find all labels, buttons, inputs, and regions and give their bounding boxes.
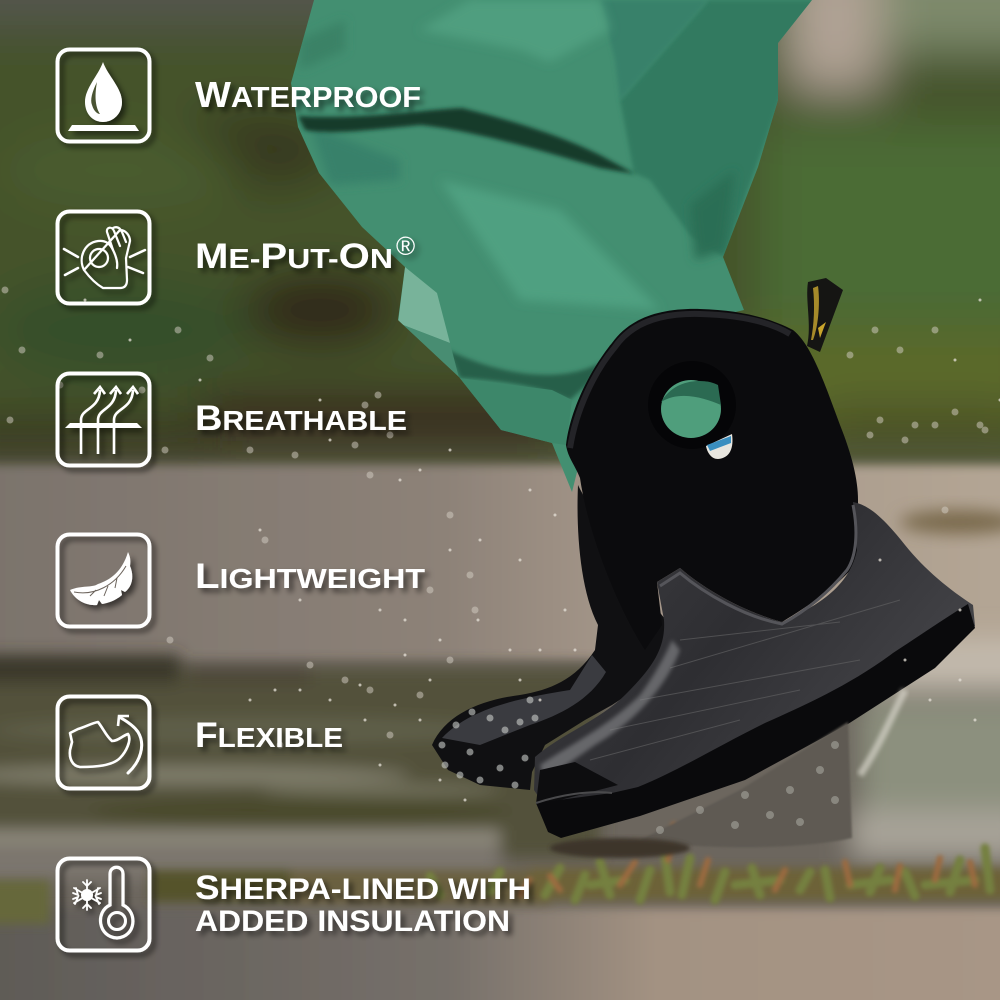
- label: me-put-on: ME-PUT-ON: [195, 237, 393, 276]
- pull tab: [807, 278, 843, 352]
- lower cuff: [459, 378, 572, 445]
- label: breathable: BREATHABLE: [195, 399, 407, 438]
- upper fold panel: [604, 0, 703, 95]
- shaft stitched edge: [570, 314, 790, 448]
- sole: [536, 604, 975, 838]
- icon: waterproof: [58, 50, 150, 142]
- puddle right of boot: [850, 640, 1000, 860]
- right trouser panel: [620, 0, 820, 257]
- road foreground: [0, 908, 1000, 1000]
- cuff shadow: [448, 350, 602, 400]
- grab handle hole: [648, 361, 736, 449]
- rubber texture: [590, 600, 900, 760]
- grass tufts: [430, 825, 990, 900]
- label: sherpa-lined with added insulation: SHERPA-LINED WITH: [195, 869, 531, 907]
- splash on back boot: [442, 700, 535, 785]
- label: sherpa-lined with added insulation: ADDED INSULATION: [195, 905, 510, 938]
- logo badge: [706, 434, 732, 459]
- icon: flexible boot: [58, 696, 150, 788]
- icon: insulation thermometer: [58, 858, 150, 950]
- rubber highlight: [540, 640, 680, 780]
- main crease: [298, 108, 635, 174]
- label: waterproof: WATERPROOF: [195, 74, 421, 115]
- label: flexible: FLEXIBLE: [195, 716, 343, 755]
- back boot: [432, 485, 680, 790]
- rubber lower: [534, 502, 975, 826]
- label: me-put-on: ®: [396, 231, 415, 261]
- toe patch: [536, 762, 618, 804]
- water splash column: [550, 690, 905, 858]
- feature list: [58, 50, 531, 950]
- left flap: [398, 267, 450, 343]
- green rain trousers: [280, 0, 820, 500]
- puddle: [0, 655, 600, 880]
- icon: me-put-on hand: [58, 212, 150, 304]
- rubber seam: [660, 505, 856, 624]
- grass strip: [0, 825, 1000, 924]
- blurred foliage: [0, 0, 1000, 470]
- label: sherpa-lined with added insulation: [195, 869, 531, 938]
- icon: breathable: [58, 374, 150, 466]
- neoprene shaft: [566, 309, 858, 650]
- icon: lightweight feather: [58, 534, 150, 626]
- wet ground: [0, 465, 1000, 660]
- water droplets: [5, 290, 1000, 800]
- label: lightweight: LIGHTWEIGHT: [195, 557, 425, 596]
- front boot: [534, 278, 975, 838]
